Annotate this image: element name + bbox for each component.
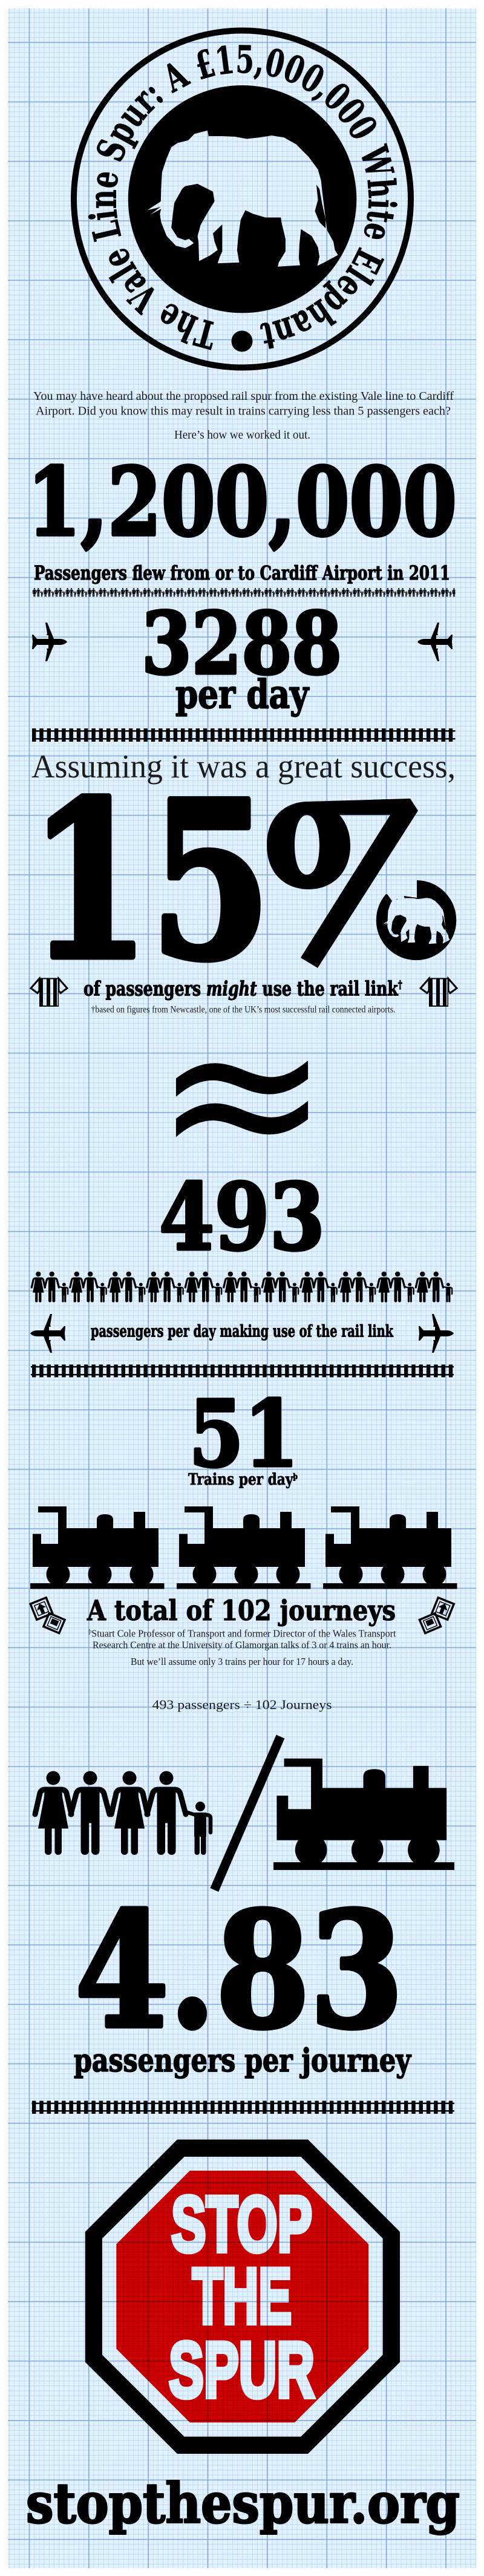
caption: trains per day: þ — [293, 1473, 298, 1482]
result number: 4.83: 4.83 — [75, 1877, 404, 2064]
sign text: STOP: STOP — [171, 2180, 312, 2268]
sign red octagon — [116, 2171, 368, 2422]
icon: train 1 — [30, 1506, 165, 1589]
badge outer ring — [74, 30, 411, 368]
railway track divider 3 — [31, 2100, 454, 2114]
railway track divider 1 — [32, 728, 455, 742]
sign text: SPUR: SPUR — [169, 2326, 315, 2414]
caption: trains per day: Trains per day — [188, 1471, 314, 1489]
icon: train 2 — [177, 1506, 311, 1589]
icon: striped shirt left — [31, 978, 67, 1007]
intro line 2: Airport. Did you know this may result in trains carrying less than 5 passengers each? — [36, 404, 451, 417]
heading: total journeys: A total of 102 journeys — [87, 1594, 396, 1627]
icon: plane left, second row — [30, 1314, 65, 1353]
division slash — [210, 1735, 284, 1892]
number: 3288: 3288 — [142, 594, 342, 694]
badge: white elephant logo — [71, 28, 414, 370]
number: 493: 493 — [159, 1163, 325, 1271]
tiny people strip — [33, 587, 455, 597]
number 15: 15 — [29, 754, 271, 1007]
heading: assuming: Assuming it was a great success, — [31, 748, 456, 785]
icon: ticket right — [419, 1598, 454, 1633]
footnote line 1: Stuart Cole Professor of Transport and former Director of the Wales Transport — [91, 1627, 396, 1639]
percent sign: % — [261, 753, 425, 1012]
footnote line 3: But we’ll assume only 3 trains per hour for 17 hours a day. — [131, 1656, 353, 1667]
percent sign — [266, 799, 418, 968]
icon: plane right, second row — [419, 1314, 454, 1353]
badge bullet — [231, 330, 253, 352]
icon: large train — [273, 1759, 454, 1870]
stop sign — [85, 2139, 400, 2454]
caption: passengers per journey: passengers per journey — [74, 2042, 411, 2079]
icon: mini elephant as lower percent circle — [376, 880, 456, 960]
intro line 1: You may have heard about the proposed rail spur from the existing Vale line to Cardiff — [33, 390, 454, 403]
icon: striped shirt right — [420, 978, 457, 1007]
caption: might use the rail link: † — [398, 979, 402, 991]
sign text: THE: THE — [192, 2252, 292, 2340]
railway track divider 2 — [31, 1365, 454, 1377]
intro text — [33, 390, 454, 442]
caption: per day: per day — [175, 672, 310, 718]
big stat: 15 percent — [47, 793, 456, 968]
sign black border — [85, 2139, 400, 2454]
people row — [31, 1272, 452, 1303]
footnote: Stuart Cole — [88, 1627, 396, 1667]
icon: plane left — [32, 623, 67, 661]
caption: might use the rail link: of passengers might use the rail link — [83, 976, 442, 1001]
icon: ticket left — [30, 1598, 65, 1633]
icon: elephant in circle — [128, 85, 356, 313]
icon: plane right — [417, 623, 453, 661]
badge ring title: The Vale Line Spur: A £15,000,000 White Elephant — [88, 45, 397, 350]
symbol: approximately equal: ≈ — [154, 969, 330, 1215]
footnote line 2: Research Centre at the University of Glamorgan talks of 3 or 4 trains an hour. — [93, 1639, 391, 1650]
intro line 3: Here’s how we worked it out. — [174, 428, 310, 442]
icon: large family — [35, 1771, 211, 1855]
footnote line 1: þ — [88, 1629, 91, 1635]
number: 51: 51 — [189, 1380, 299, 1488]
footnote: newcastle: †based on figures from Newcastle, one of the UK’s most successful rail connected airports. — [91, 1004, 396, 1015]
equation text: 493 passengers ÷ 102 Journeys — [152, 1697, 332, 1712]
icon: train 3 — [323, 1506, 457, 1589]
